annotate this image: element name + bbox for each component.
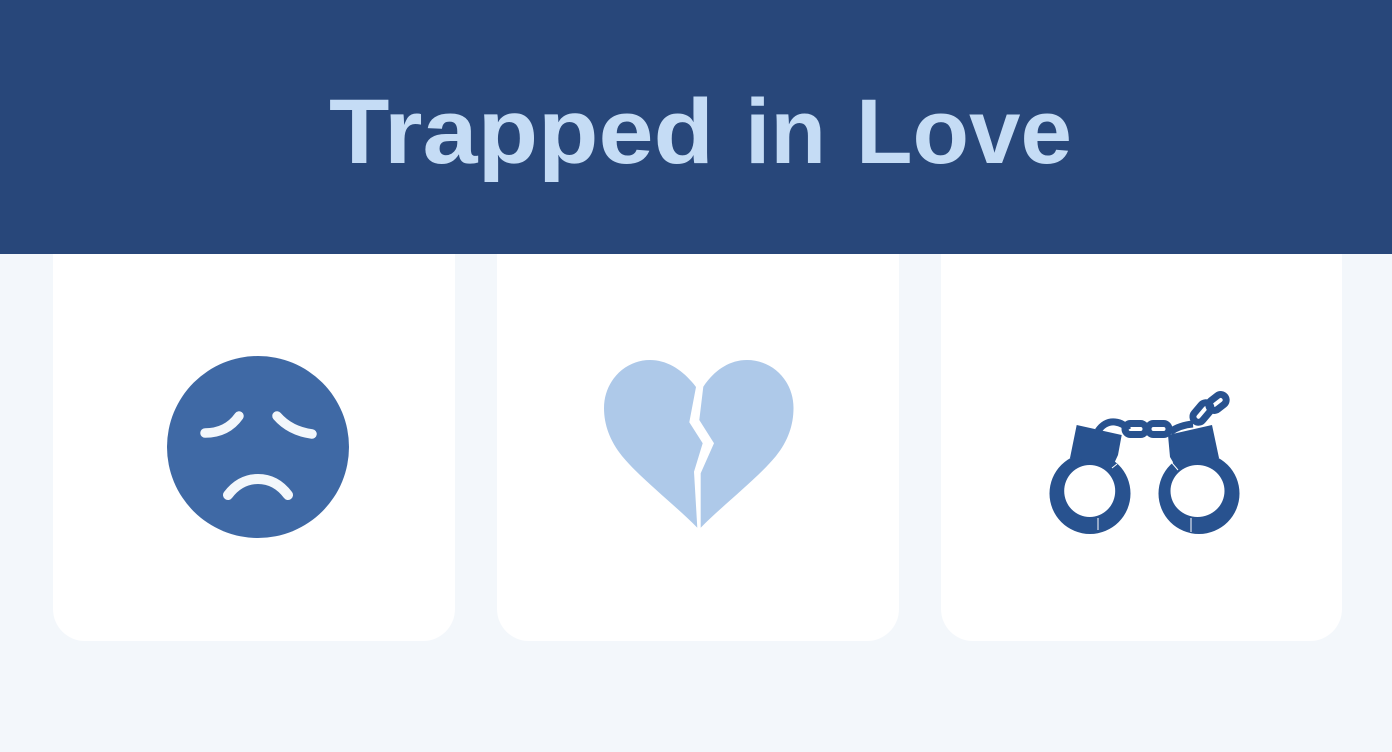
left cuff <box>1050 425 1130 534</box>
right cuff <box>1158 425 1240 534</box>
icon: handcuffs <box>1050 392 1240 534</box>
title: Trapped <box>329 81 714 183</box>
title: in <box>745 81 826 183</box>
title <box>329 81 1072 183</box>
icon: sad face <box>167 356 349 538</box>
header band <box>0 0 1392 254</box>
panel: middle card <box>497 200 899 641</box>
icon: broken heart <box>604 360 794 528</box>
title: Love <box>856 81 1072 183</box>
panel: right card <box>941 200 1342 641</box>
panel: left card <box>53 200 455 641</box>
chain <box>1098 392 1228 434</box>
